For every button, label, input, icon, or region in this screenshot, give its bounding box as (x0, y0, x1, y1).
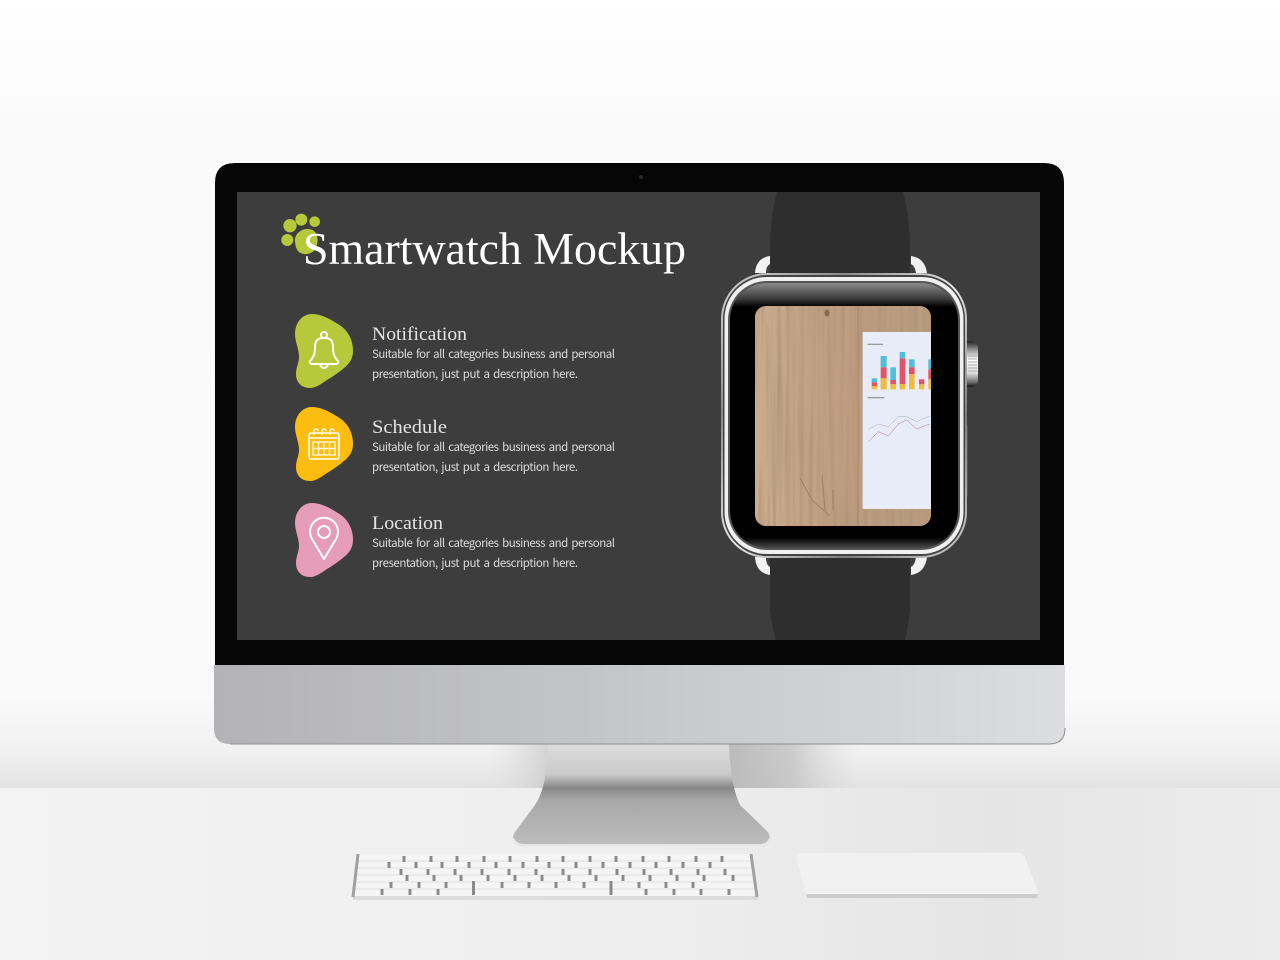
smartwatch (721, 192, 978, 640)
heading: Location (372, 514, 443, 534)
icon: map pin on pink blob (295, 503, 353, 577)
monitor chin (214, 665, 1065, 744)
desk surface (0, 788, 1280, 960)
webcam (639, 175, 643, 179)
description: Suitable for all categories business and personal (372, 439, 615, 455)
keyboard body (353, 854, 758, 897)
watch case (721, 273, 967, 558)
side button (964, 425, 968, 497)
monitor bezel (215, 163, 1064, 665)
wood grain (755, 306, 931, 526)
icon: calendar on yellow blob (295, 407, 353, 481)
line chart (868, 416, 930, 442)
item: schedule: presentation, just put a description here. (372, 459, 578, 475)
description: Suitable for all categories business and personal (372, 346, 615, 362)
description: Suitable for all categories business and personal (372, 535, 615, 551)
stand base edge (513, 838, 770, 845)
watch crown (960, 341, 978, 387)
heading: Schedule (372, 418, 447, 438)
watch glass (730, 283, 958, 548)
paper with charts (863, 332, 936, 509)
monitor stand (513, 744, 770, 846)
heading: Notification (372, 325, 467, 345)
key gaps (382, 856, 733, 895)
bar chart (872, 352, 934, 389)
slide screen (237, 192, 1040, 640)
wood knots (800, 306, 858, 526)
stand shadow on wall, left side (490, 744, 550, 788)
item: location: presentation, just put a description here. (372, 555, 578, 571)
watch display photo (755, 306, 936, 526)
trackpad (797, 853, 1038, 898)
monitor (214, 163, 1065, 744)
keyboard edges (353, 854, 757, 897)
watch lugs (755, 256, 927, 575)
icon: bell on green blob (295, 314, 353, 388)
title: Smartwatch Mockup (303, 224, 686, 274)
item: notification (295, 314, 615, 388)
item: location (295, 503, 615, 577)
paw logo (281, 214, 320, 254)
item: schedule (295, 407, 615, 481)
stand shadow on wall, right side (725, 744, 860, 788)
item: notification: presentation, just put a description here. (372, 366, 578, 382)
watch strap (770, 192, 910, 280)
key rows (353, 861, 757, 889)
keyboard (353, 854, 758, 900)
